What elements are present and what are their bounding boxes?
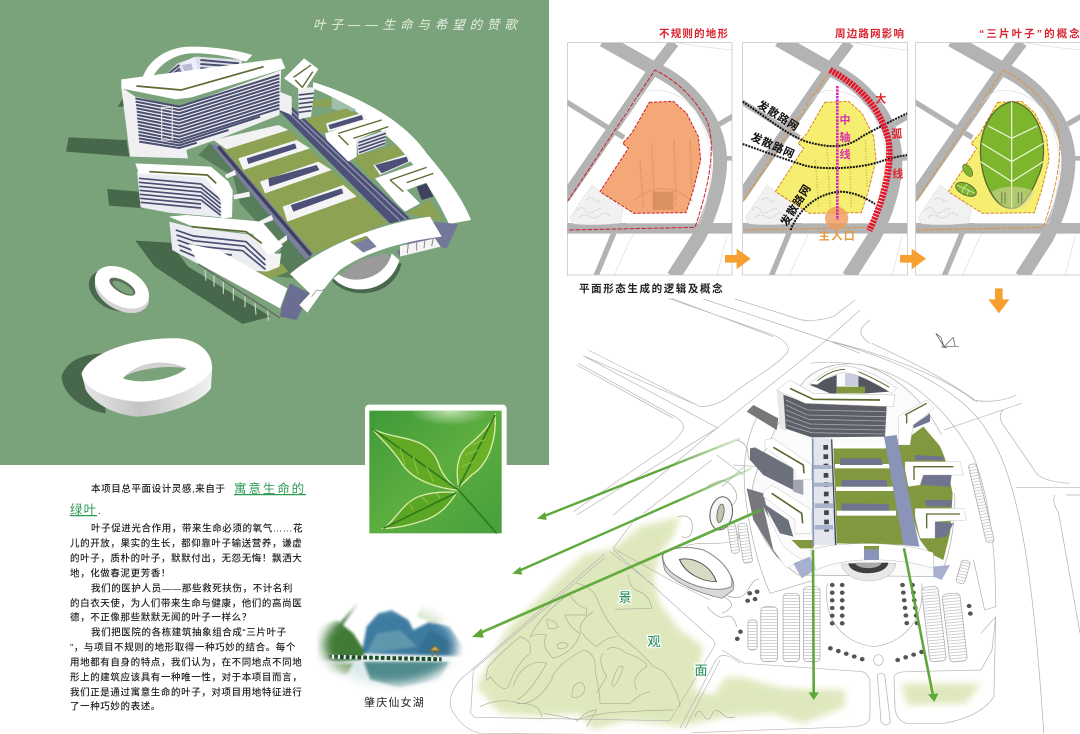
period: .	[98, 506, 101, 517]
panel: three leaves concept	[913, 40, 1080, 277]
deck edge	[198, 264, 280, 318]
paragraph: leaf	[70, 522, 303, 580]
landscape area	[450, 517, 845, 734]
left corridor	[210, 143, 313, 260]
big leaf	[980, 102, 1043, 209]
arc label: 弧	[891, 126, 902, 140]
paragraph: concept: 我们正是通过寓意生命的叶子，对项目用地特征进行	[70, 686, 302, 698]
paragraph: concept: 我们把医院的各栋建筑抽象组合成“三片叶子	[91, 626, 287, 638]
stair zigzag	[312, 287, 328, 297]
plan lawns	[792, 427, 953, 560]
highlighted phrase continued: 绿叶	[70, 502, 97, 517]
arrow 2	[900, 249, 926, 269]
lake photo	[316, 604, 463, 689]
left wing block lower	[169, 215, 283, 272]
plan tower	[777, 380, 895, 437]
diagram headings: 不规则的地形	[659, 27, 729, 40]
plan right corridor	[884, 435, 919, 547]
paragraph: leaf: 地，化做春泥更芳香！	[70, 568, 171, 580]
right landscape wash	[901, 683, 981, 705]
plan tower shadow	[747, 405, 778, 430]
paragraph: concept: 了一种巧妙的表述。	[70, 700, 161, 712]
rotunda ring	[333, 253, 399, 289]
road network labels	[749, 97, 814, 228]
heading 3: “三片叶子”的概念	[979, 27, 1080, 40]
terrain contours	[480, 575, 735, 727]
plan slot bars	[832, 444, 952, 516]
slot bars	[238, 113, 411, 222]
arc label: 大	[875, 92, 886, 106]
stadium ring	[662, 495, 735, 598]
axis label	[840, 112, 850, 161]
landscape squiggles near stadium	[678, 440, 788, 627]
title: 叶子——生命与希望的赞歌	[313, 18, 522, 32]
front curved band	[290, 217, 442, 313]
connector bridges	[225, 170, 287, 247]
arrow 3 down	[988, 288, 1009, 313]
main entrance label: 主入口	[819, 228, 856, 242]
lawn main	[222, 129, 387, 253]
front-left wing deck	[188, 244, 287, 308]
plan left wing upper	[750, 438, 812, 495]
rear curved block	[142, 47, 252, 82]
paragraph: concept	[70, 626, 302, 712]
paragraph: leaf: 的叶子，质朴的叶子，默默付出，无怨无悔！飘洒大	[70, 552, 302, 564]
mountains	[362, 610, 463, 657]
axis label: 轴	[840, 130, 850, 144]
diffusing road network dotted lines	[743, 102, 907, 230]
rear-right small block	[279, 58, 318, 119]
right wing 1	[325, 118, 392, 162]
band opening lawn	[350, 236, 367, 244]
axis label: 中	[840, 112, 850, 126]
plan rear crescent	[809, 366, 897, 393]
paragraph: leaf: 叶子促进光合作用，带来生命必须的氧气……花	[91, 522, 303, 534]
paragraph: concept: 形上的建筑应该具有一种唯一性，对于本项目而言，	[70, 672, 302, 684]
right wing 2	[375, 165, 437, 212]
road network labels: 发散路网	[755, 97, 802, 134]
panel: surrounding roads	[740, 40, 909, 277]
road network labels: 发散路网	[749, 129, 797, 161]
plan rotunda	[842, 563, 896, 581]
road network labels: 发散路网	[777, 181, 814, 228]
body text	[70, 481, 306, 712]
view arrow 3	[472, 510, 761, 638]
landscape view labels	[618, 590, 708, 678]
right arc glazing	[332, 97, 357, 113]
lawn courtyard small	[257, 263, 288, 281]
landscape view labels: 观	[647, 634, 661, 649]
central axis	[833, 86, 841, 220]
bridge	[328, 657, 452, 659]
3D building model	[62, 47, 471, 417]
site body	[752, 364, 955, 577]
paragraph: medical staff: 德，不正像那些默默无闻的叶子一样么？	[70, 612, 252, 624]
right corridor	[278, 105, 410, 223]
heading 2: 周边路网影响	[835, 27, 905, 40]
great arc dashed line	[830, 70, 890, 231]
courtyard, lawns and right wings	[198, 82, 471, 281]
paragraph: concept: ”，与项目不规则的地形取得一种巧妙的结合。每个	[70, 642, 296, 654]
arc label: 线	[892, 166, 903, 180]
small leaves	[954, 162, 978, 199]
intro line: 本项目总平面设计灵感,来自于	[91, 483, 226, 495]
trees	[317, 620, 365, 663]
paragraph: medical staff: 我们的医护人员——那些救死扶伤，不计名利	[91, 582, 293, 594]
pavilion	[430, 646, 440, 657]
plan left corridor	[812, 438, 836, 547]
rear-right lawn	[313, 98, 332, 107]
left wing block upper	[135, 163, 233, 218]
lawn middle right	[352, 145, 408, 180]
main tower	[121, 58, 285, 158]
landscape green wash	[477, 517, 845, 730]
diagram caption: 平面形态生成的逻辑及概念	[579, 282, 724, 295]
landscape view labels: 景	[618, 590, 632, 605]
concept diagrams	[565, 40, 1080, 313]
stairs	[280, 283, 310, 320]
plan right wings	[898, 400, 967, 538]
upper-left road linework	[573, 298, 860, 515]
highlighted phrase: 寓意生命的	[234, 481, 306, 496]
lower and right road linework	[662, 320, 1080, 733]
paragraph: medical staff: 的白衣天使，为人们带来生命与健康，他们的高尚医	[70, 598, 302, 610]
lawn upper	[303, 108, 357, 133]
underside canopy	[400, 238, 441, 257]
view arrow 4	[809, 550, 819, 700]
paragraph: medical staff	[70, 582, 302, 624]
plan left wing lower	[747, 485, 812, 568]
background: green panel	[0, 0, 549, 465]
rotunda shadow	[333, 263, 402, 293]
outer right arc	[313, 82, 471, 224]
lawn lower right	[407, 200, 443, 222]
lake caption: 肇庆仙女湖	[364, 695, 425, 709]
plan blue end pieces	[793, 557, 950, 580]
icon: origami bird	[936, 333, 959, 348]
small oval ring	[81, 257, 157, 322]
photo leaves	[372, 415, 495, 528]
panel: irregular terrain	[565, 40, 733, 277]
building complex plan	[747, 364, 967, 581]
dark courtyard ground	[198, 143, 313, 278]
plan front band	[810, 543, 933, 570]
band opening	[350, 236, 377, 253]
landscape view labels: 面	[694, 663, 708, 678]
axis label: 线	[840, 147, 850, 161]
site outline roads	[450, 517, 740, 734]
arrow 1	[725, 249, 751, 269]
paragraph: leaf: 儿的开放，果实的生长，都仰靠叶子输送营养，谦虚	[70, 538, 302, 550]
water	[322, 659, 452, 688]
plaza trees	[737, 585, 971, 660]
blue lower storey	[397, 222, 458, 257]
top white bar	[213, 125, 288, 149]
large leaf ring	[62, 338, 212, 417]
master plan	[450, 298, 1080, 734]
view arrow 1	[537, 438, 740, 520]
leaf photo with white frame	[365, 396, 507, 538]
view arrows	[472, 438, 938, 702]
view arrow 2	[512, 468, 752, 575]
view arrow 5	[904, 548, 938, 702]
rotunda barrel	[339, 253, 390, 282]
paragraph: concept: 用地都有自身的特点，我们认为，在不同地点不同地	[70, 656, 302, 668]
model ground shadows	[66, 98, 271, 324]
front band, rotunda and left wing	[188, 217, 442, 321]
front-left wing columns	[205, 270, 268, 321]
parking rows	[727, 463, 995, 662]
arc label	[875, 92, 903, 180]
main entrance circle	[825, 207, 848, 230]
